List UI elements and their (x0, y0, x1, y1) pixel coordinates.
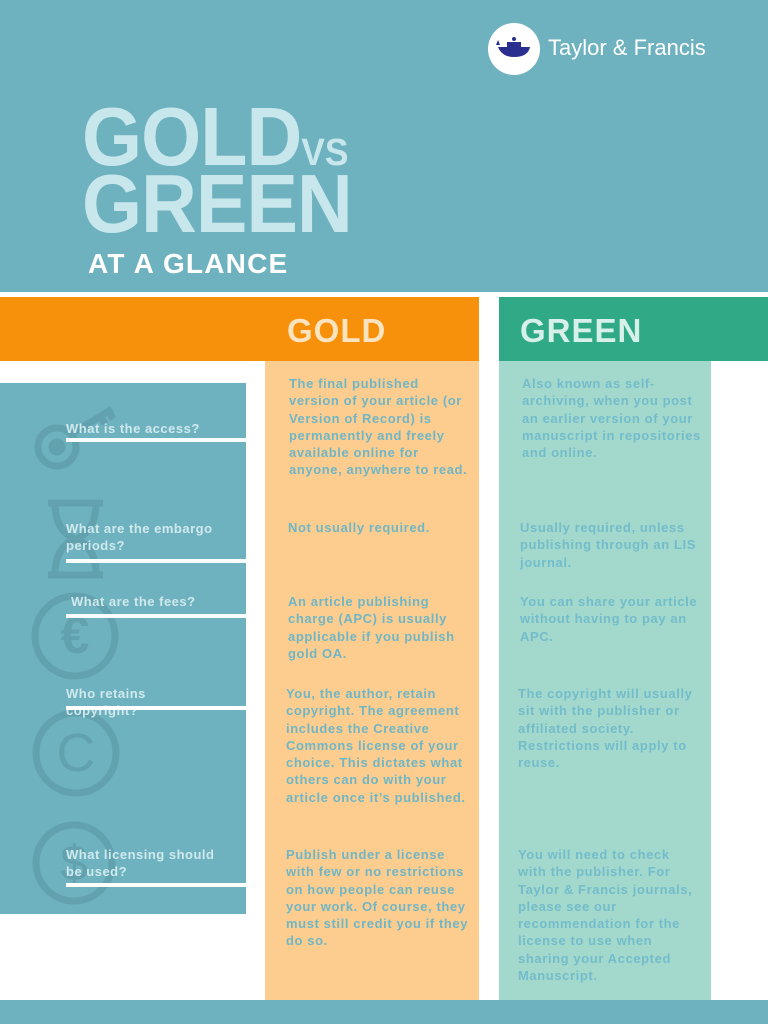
gold column (265, 361, 479, 1000)
green column (499, 361, 711, 1000)
icons: C (56, 723, 96, 783)
question: copyright: copyright? (66, 703, 138, 718)
title: GOLDVS (82, 90, 348, 183)
gold answers: The final published version of your article (or Version of Record) is permanently and freely available online for anyone, anywhere to read. (289, 376, 467, 477)
question: copyright (66, 686, 146, 718)
green header (499, 297, 768, 361)
icon: lamp (488, 23, 540, 75)
question: licensing: What licensing should (66, 847, 214, 862)
gold header (0, 297, 479, 361)
panel: questions (0, 383, 246, 914)
logo text: Taylor & Francis (548, 35, 706, 60)
text: An article publishing charge (APC) is usually applicable if you publish gold OA. (288, 594, 455, 661)
text: Usually required, unless publishing through an LIS journal. (520, 520, 696, 570)
icons: $ (60, 835, 88, 891)
text: You, the author, retain copyright. The agreement includes the Creative Commons license of your choice. This dictates what others can do with your article once it’s published. (286, 686, 466, 805)
question: embargo (66, 521, 213, 553)
question: copyright: Who retains (66, 686, 146, 701)
text: You will need to check with the publisher. For Taylor & Francis journals, please see our recommendation for the license to use when sharing your Accepted Manuscript. (518, 847, 692, 983)
subtitle: AT A GLANCE (88, 248, 288, 279)
question: fees: What are the fees? (71, 594, 196, 609)
icons: € (61, 607, 89, 665)
title: GREEN (82, 157, 352, 250)
bottom bar (0, 1000, 768, 1024)
question: licensing (66, 847, 214, 879)
icons (32, 406, 120, 904)
text: You can share your article without having to pay an APC. (520, 594, 697, 644)
question: licensing: be used? (66, 864, 127, 879)
title (82, 90, 352, 250)
question: embargo: periods? (66, 538, 125, 553)
text: The copyright will usually sit with the publisher or affiliated society. Restrictions will apply to reuse. (518, 686, 693, 770)
green answers: Also known as self-archiving, when you post an earlier version of your manuscript in repositories and online. (522, 376, 701, 460)
question: embargo: What are the embargo (66, 521, 213, 536)
text: Not usually required. (288, 520, 430, 535)
header background (0, 0, 768, 292)
gold header: GOLD (287, 312, 386, 349)
logo (488, 23, 706, 75)
question: access: What is the access? (66, 421, 200, 436)
text: Publish under a license with few or no restrictions on how people can reuse your work. Of course, they must still credit you if they do so. (286, 847, 468, 948)
green header: GREEN (520, 312, 642, 349)
